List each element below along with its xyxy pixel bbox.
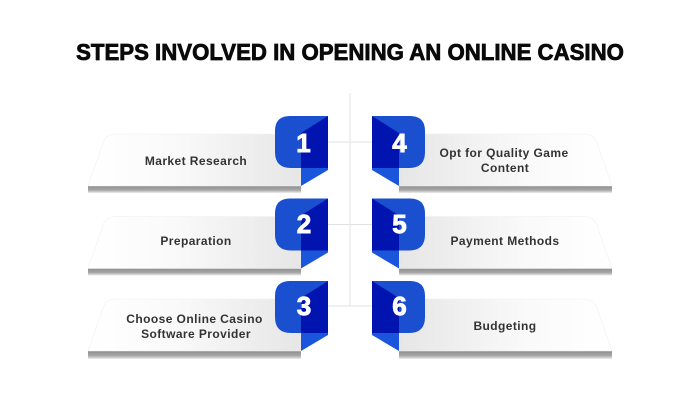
step 4: Opt for Quality Game Content: 4 [392,128,407,158]
step 2: Preparation: 2 [297,209,311,239]
step 4: Opt for Quality Game Content: Opt for Quality Game [439,146,569,160]
title: STEPS INVOLVED IN OPENING AN ONLINE CASINO [76,39,624,65]
step 1: Market Research [88,116,328,193]
step 2: Preparation [88,198,328,276]
step 5: Payment Methods [372,198,612,276]
step 1: Market Research: Market Research [145,154,247,168]
step 3: Choose Online Casino Software Provider [88,281,328,359]
step 3: Choose Online Casino Software Provider: Choose Online Casino [126,312,263,326]
step 2: Preparation: Preparation [160,234,232,248]
step 3: Choose Online Casino Software Provider: Software Provider [141,327,251,341]
step 1: Market Research: 1 [296,128,311,158]
step 4: Opt for Quality Game Content [372,116,612,193]
step 6: Budgeting: 6 [392,291,407,321]
step 4: Opt for Quality Game Content: Content [481,161,529,175]
step 6: Budgeting: Budgeting [473,319,537,333]
step 5: Payment Methods: 5 [392,209,407,239]
step 6: Budgeting [372,281,612,359]
step 3: Choose Online Casino Software Provider: 3 [297,291,311,321]
step 5: Payment Methods: Payment Methods [450,234,560,248]
